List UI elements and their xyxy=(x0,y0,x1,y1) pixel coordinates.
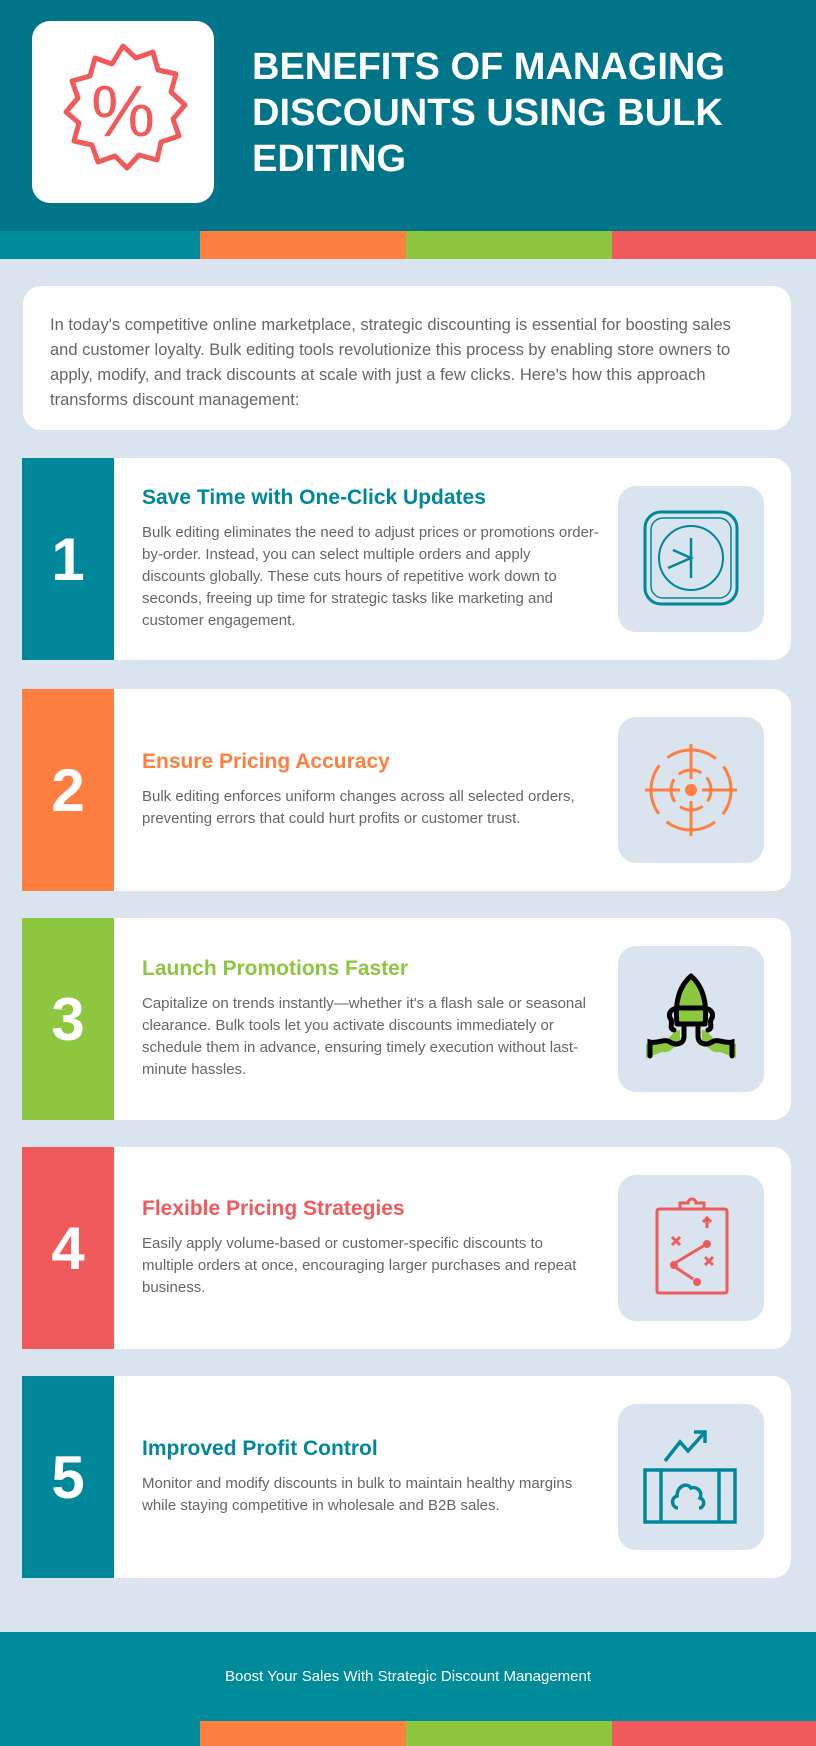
text: card 4: Easily apply volume-based or customer-specific discounts to xyxy=(142,1235,543,1252)
text: card 3: Capitalize on trends instantly—whether it's a flash sale or seasonal xyxy=(142,995,586,1012)
text: card 5: Monitor and modify discounts in bulk to maintain healthy margins xyxy=(142,1475,572,1492)
text: card 3 xyxy=(142,957,586,1078)
panel: card 5 xyxy=(22,1376,791,1578)
text: card 1 xyxy=(142,486,599,629)
number 5 xyxy=(22,1376,114,1578)
header xyxy=(0,0,816,231)
number 1 xyxy=(22,458,114,660)
footer: Boost Your Sales With Strategic Discount Management xyxy=(225,1668,591,1685)
number 4: 4 xyxy=(51,1214,85,1282)
panel: card 4 xyxy=(22,1147,791,1349)
number 1: 1 xyxy=(51,526,85,592)
text: card 2 xyxy=(142,750,575,827)
icon: rocket xyxy=(618,946,764,1092)
panel: card 1 xyxy=(22,458,791,660)
icon: chart and cloud xyxy=(618,1404,764,1550)
text: card 4 xyxy=(142,1197,576,1296)
number 3 xyxy=(22,918,114,1120)
text: card 3: clearance. Bulk tools let you activate discounts immediately or xyxy=(142,1017,554,1034)
text: card 1: discounts globally. These cuts hours of repetitive work down to xyxy=(142,568,557,585)
intro text block: In today's competitive online marketplace, strategic discounting is essential for boosting sales and customer loyalty. Bulk editing tools revolutionize this process by enabling store owners to apply, modify, and track discounts at scale with just a few clicks. Here's how this approach transforms discount management: xyxy=(50,316,731,409)
text: card 5: Improved Profit Control xyxy=(142,1437,378,1460)
icon: clipboard strategy xyxy=(618,1175,764,1321)
icon: target xyxy=(618,717,764,863)
footer xyxy=(0,1632,816,1721)
panel: card 2 xyxy=(22,689,791,891)
text: card 3: minute hassles. xyxy=(142,1061,246,1078)
text: card 2: Ensure Pricing Accuracy xyxy=(142,750,390,773)
text: card 5: while staying competitive in wholesale and B2B sales. xyxy=(142,1497,500,1514)
text: card 2: preventing errors that could hurt profits or customer trust. xyxy=(142,810,520,827)
text: card 4: Flexible Pricing Strategies xyxy=(142,1197,405,1220)
number 3: 3 xyxy=(51,986,85,1052)
number 5: 5 xyxy=(51,1444,85,1510)
text: card 3: schedule them in advance, ensuring timely execution without last- xyxy=(142,1039,578,1056)
number 4 xyxy=(22,1147,114,1349)
title: BENEFITS OF MANAGING DISCOUNTS USING BULK EDITING xyxy=(252,46,725,180)
text: card 2: Bulk editing enforces uniform changes across all selected orders, xyxy=(142,788,575,805)
text: card 3: Launch Promotions Faster xyxy=(142,957,408,980)
icon: discount badge: % xyxy=(91,72,155,152)
number 2 xyxy=(22,689,114,891)
panel: card 3 xyxy=(22,918,791,1120)
text: card 4: business. xyxy=(142,1279,205,1296)
number 2: 2 xyxy=(51,756,85,824)
text: card 1: Save Time with One-Click Updates xyxy=(142,486,486,509)
intro text block xyxy=(23,286,791,430)
text: card 1: by-order. Instead, you can select multiple orders and apply xyxy=(142,546,531,563)
text: card 1: customer engagement. xyxy=(142,612,295,629)
text: card 4: multiple orders at once, encouraging larger purchases and repeat xyxy=(142,1257,576,1274)
text: card 1: Bulk editing eliminates the need to adjust prices or promotions order- xyxy=(142,524,599,541)
text: card 5 xyxy=(142,1437,572,1514)
text: card 1: seconds, freeing up time for strategic tasks like marketing and xyxy=(142,590,553,607)
icon: clock xyxy=(618,486,764,632)
icon: discount badge xyxy=(32,21,214,203)
